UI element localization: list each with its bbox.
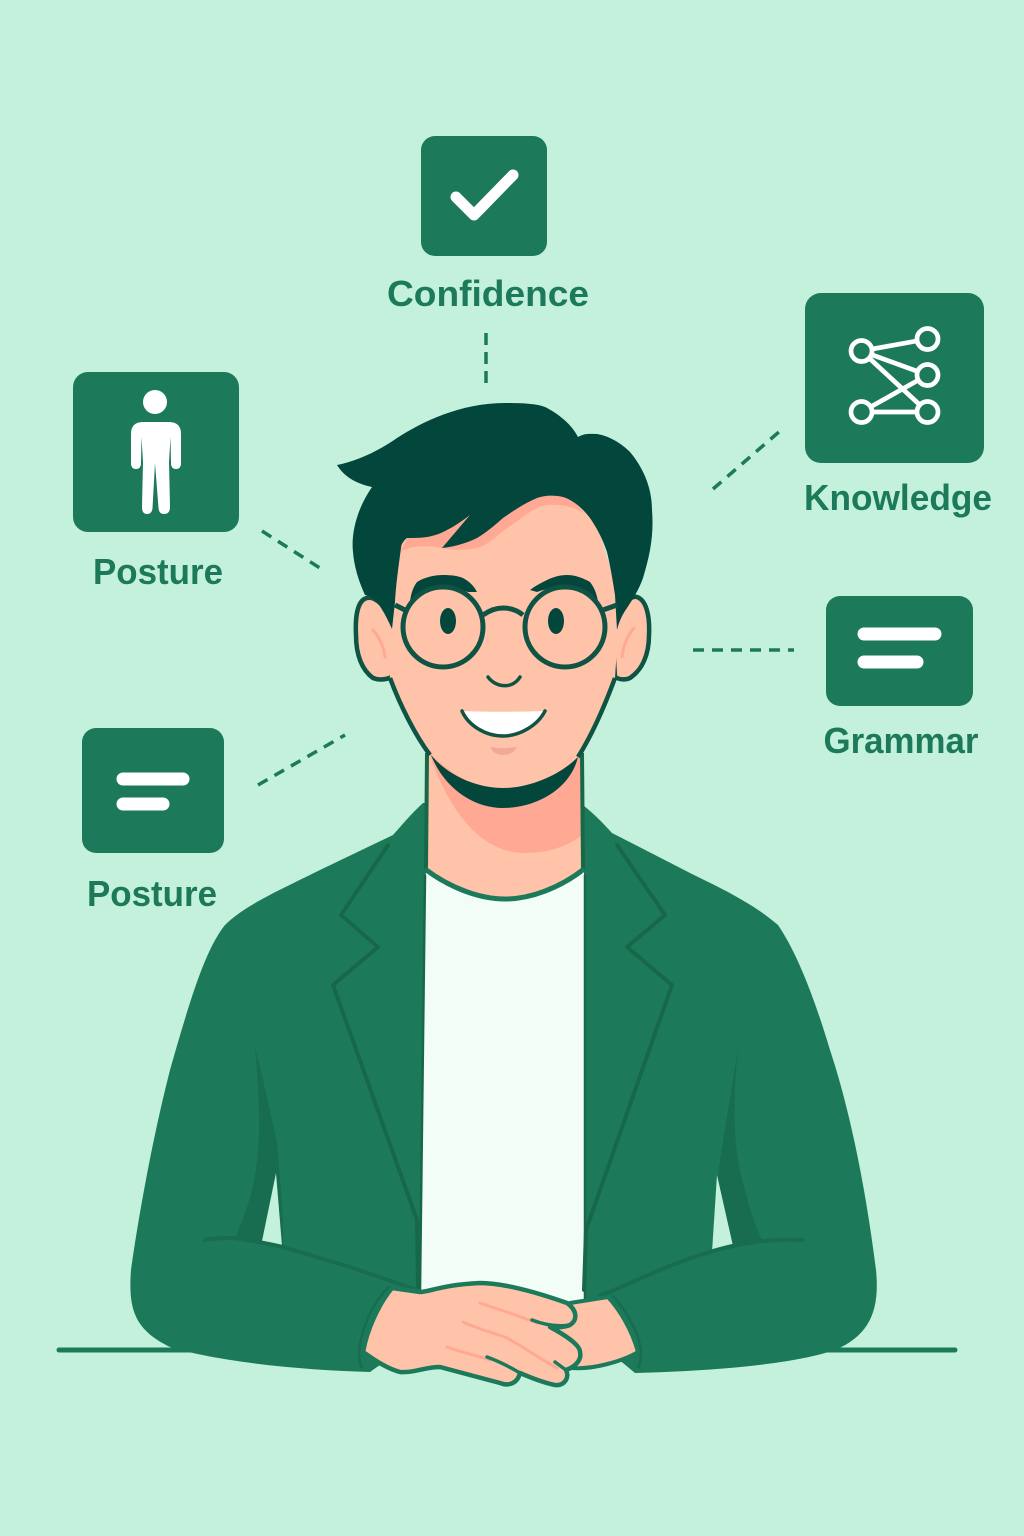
hair shadow [400,485,585,552]
lapel lines [333,845,418,1290]
mouth [462,711,545,736]
icon card: grammar [826,596,973,706]
jaw outline [390,678,615,757]
label: knowledge: Knowledge [804,477,992,518]
ear details [373,628,634,657]
eyes [440,608,456,634]
arm gaps [262,1173,282,1246]
label: confidence: Confidence [387,273,589,314]
icon card: knowledge [805,293,984,463]
glasses [395,587,617,667]
mouth outline [462,711,545,736]
lip [490,747,517,755]
cuff rims [359,1286,641,1368]
hair [337,403,653,630]
icon: standing person [131,390,181,514]
connector: posture two [258,735,345,785]
ear right [612,597,649,679]
desk line [59,1348,955,1352]
connector: knowledge [713,431,780,489]
finger outlines [487,1320,570,1373]
t-shirt [420,870,584,1310]
label: posture one: Posture [93,551,223,592]
icon: text lines [123,779,183,804]
right hand [540,1297,638,1368]
sleeve folds [235,1047,283,1247]
sleeve lines [205,1238,417,1290]
face [388,500,620,790]
connector: grammar [693,648,794,652]
connector: posture one [262,531,323,570]
icon: check mark [456,175,513,215]
icon card: posture lines [82,728,224,853]
neck [426,745,583,905]
label: grammar: Grammar [824,720,978,761]
eyebrows [410,575,477,602]
icon card: confidence [421,136,547,256]
nose [488,677,520,686]
shirt collar [425,869,584,899]
neck shadow [430,755,582,853]
neck outlines [426,753,583,870]
icon card: posture figure [73,372,239,532]
left hand [363,1283,580,1385]
person illustration [130,403,877,1385]
ear left [356,598,395,679]
beard band [431,755,578,808]
icon: network [851,328,938,422]
jacket [130,803,877,1373]
finger creases [447,1303,557,1368]
connector: confidence [484,333,488,386]
label: posture two: Posture [87,873,217,914]
icon: text lines [864,634,935,662]
shirt edges [420,875,585,1300]
